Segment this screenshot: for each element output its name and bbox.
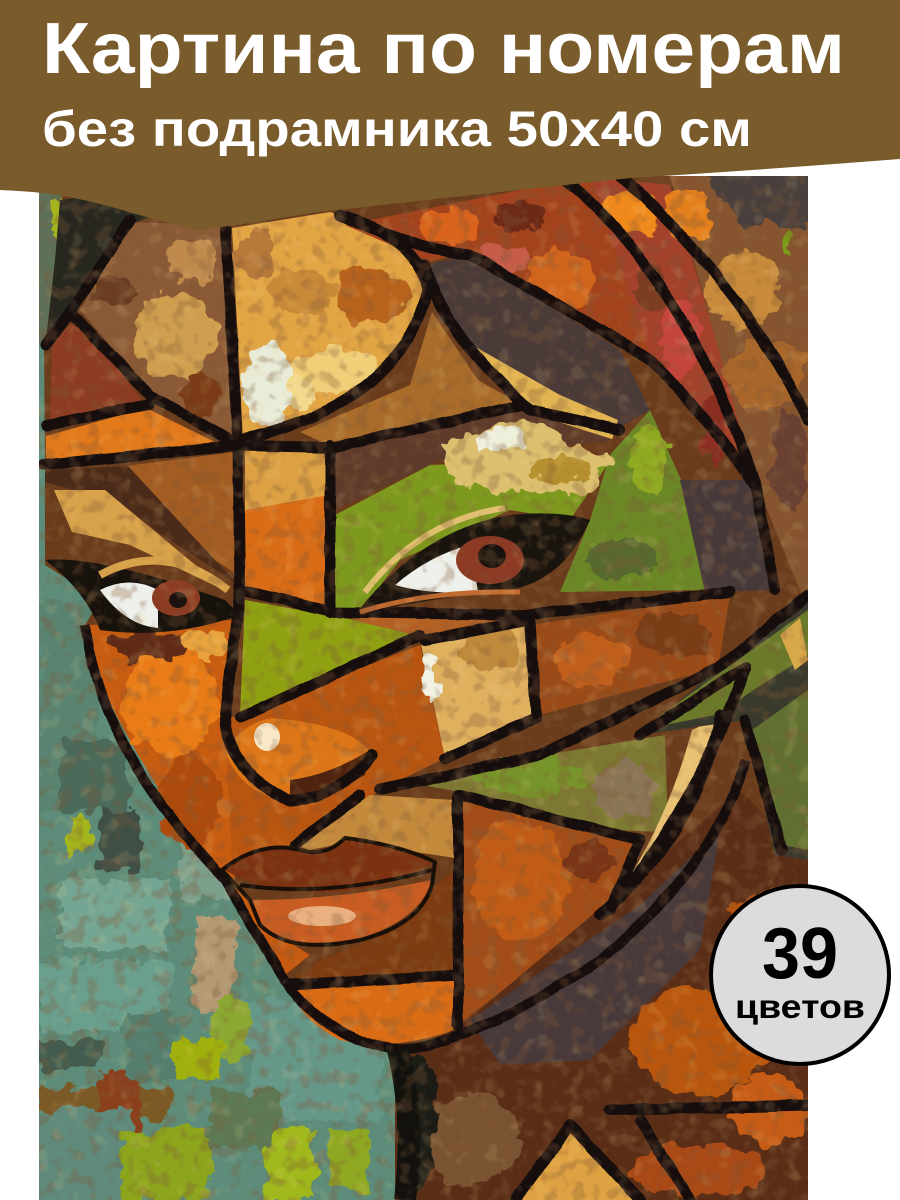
far-right rust area	[670, 176, 808, 610]
mid-band brown tile	[530, 595, 730, 716]
cream lens tile	[472, 345, 618, 440]
right lower tile	[752, 690, 808, 850]
badge: 39 colours: цветов	[735, 988, 865, 1025]
nose highlight	[254, 723, 280, 751]
green band patches	[475, 755, 657, 818]
forehead-right tile	[300, 312, 522, 448]
right red band	[592, 180, 741, 452]
nose shadow	[290, 750, 370, 802]
upper-lip area	[295, 795, 455, 858]
cream shoulder tile	[515, 1124, 640, 1200]
lip highlight	[288, 906, 356, 926]
nose-bridge top gold	[245, 440, 330, 510]
left eye	[45, 560, 240, 633]
top banner	[0, 0, 900, 230]
grey hair band	[425, 255, 650, 430]
gold patches on upper-left tile	[93, 238, 218, 420]
badge: 39 colours: 39	[762, 914, 838, 994]
center-left nose-bridge tile	[245, 440, 330, 610]
badge: 39 colours	[711, 886, 889, 1064]
top-left hair	[46, 198, 148, 334]
lip outline	[222, 838, 435, 945]
green triangle tile	[240, 600, 420, 715]
dark-grey tile	[470, 830, 720, 1065]
neck dark line	[398, 1050, 409, 1200]
right eye-shadow: cream	[440, 420, 612, 495]
upper-left brown tile	[80, 222, 235, 435]
jaw right of mouth	[290, 870, 455, 982]
left eyelid gold	[54, 490, 228, 592]
center cheek tile	[225, 645, 445, 862]
cheek tile patches	[472, 820, 614, 940]
left cheek	[90, 620, 254, 914]
small cream tile	[780, 618, 808, 670]
left-cheek upper tile	[125, 452, 238, 575]
mosaic top colour flecks	[420, 200, 595, 310]
mottled paint texture	[39, 176, 808, 1200]
neck texture	[402, 890, 820, 1196]
left jaw	[228, 880, 310, 975]
title line 2: без подрамника 50х40 см	[42, 101, 752, 157]
painting: stained-glass portrait of a woman	[30, 170, 820, 1200]
figure base mass	[44, 176, 802, 1044]
lower-right neck and shoulder mass	[395, 790, 808, 1200]
right green band area	[640, 600, 808, 860]
moon-shaped forehead tile	[232, 212, 425, 440]
mosaic top tile	[345, 182, 650, 353]
right band flecks	[602, 193, 729, 464]
cream tile shading	[423, 628, 520, 706]
right eye	[355, 508, 590, 615]
title line 1: Картина по номерам	[42, 9, 845, 89]
left eyebrow	[45, 466, 238, 585]
left cheek patches	[100, 631, 231, 850]
dark grey tile	[680, 480, 775, 592]
black lead lines	[44, 176, 808, 1200]
green-grey band	[395, 735, 668, 832]
painting background	[39, 192, 395, 1200]
nose	[225, 718, 372, 802]
chin	[288, 975, 455, 1044]
orange band tile	[46, 408, 215, 462]
brown tile patches	[554, 611, 706, 686]
green tile right of eye	[560, 410, 705, 592]
mid-band left tile	[352, 618, 498, 634]
far-right patches	[666, 170, 815, 510]
lower lip	[250, 880, 432, 943]
left red triangle tile	[50, 318, 142, 422]
forehead patches	[235, 231, 405, 427]
brown brow band over right eye	[335, 410, 615, 510]
face outline	[85, 625, 745, 1050]
mid-band cream tile	[420, 626, 532, 754]
upper lip	[225, 840, 432, 892]
cream sliver	[608, 718, 718, 910]
lower-right cheek tile	[462, 800, 640, 1022]
olive strap	[640, 610, 808, 730]
green tile shading	[585, 425, 668, 580]
right eye-shadow: green	[335, 458, 612, 612]
